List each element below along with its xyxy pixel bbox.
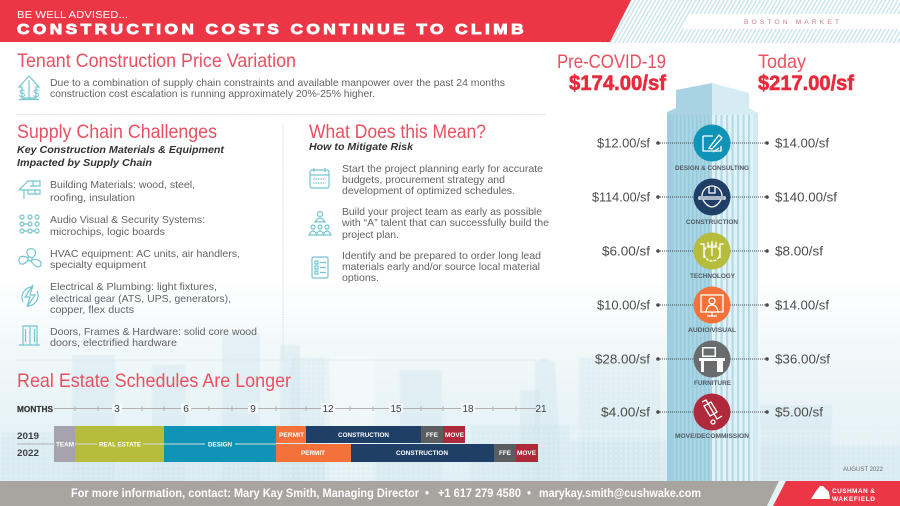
timeline axis: 9: [250, 404, 256, 415]
item: hvac: [50, 248, 240, 271]
pre-covid heading: $174.00/sf: [569, 72, 667, 95]
row: construction: CONSTRUCTION: [686, 219, 738, 226]
panel: tenant construction price variation: [17, 50, 505, 100]
icon: desk: [699, 347, 725, 372]
row: design and consulting: $12.00/sf: [597, 136, 650, 150]
row: audio visual: [597, 286, 829, 334]
item: build team: [341, 206, 549, 241]
item: start planning: [342, 163, 543, 197]
item: electrical: electrical gear (ATS, UPS, generators),: [50, 293, 231, 305]
background skyline: [0, 280, 900, 481]
subheading: [17, 144, 224, 169]
2019 bars: CONSTRUCTION: [338, 432, 389, 439]
contact line: +1 617 279 4580: [438, 488, 521, 500]
item: electrical: copper, flex ducts: [50, 304, 134, 316]
panel: schedules: [17, 370, 547, 462]
item: building materials: roofing, insulation: [50, 192, 135, 204]
2022 bars: PERMIT: [301, 450, 325, 457]
row: construction: $114.00/sf: [592, 190, 650, 204]
icon: team: [309, 212, 331, 235]
gantt bars: [54, 426, 538, 462]
2022 bars: [276, 444, 538, 462]
2019 bars: MOVE: [445, 432, 464, 439]
row: move and decommission: $5.00/sf: [775, 404, 823, 420]
year labels: 2019: [17, 431, 39, 442]
text block: construction cost escalation is running approximately 20%-25% higher.: [50, 88, 375, 100]
item: start planning: budgets, procurement strategy and: [342, 174, 505, 186]
logo: [811, 486, 875, 503]
text block: Due to a combination of supply chain constraints and available manpower over the past 24 months: [50, 77, 505, 89]
heading: Real Estate Schedules Are Longer: [17, 370, 291, 392]
2022 bars: MOVE: [517, 450, 536, 457]
subheading: Impacted by Supply Chain: [17, 157, 152, 169]
icon: gear and wrench: [700, 241, 724, 261]
row: technology: TECHNOLOGY: [690, 273, 736, 280]
icon: rising dollars: $: [33, 88, 39, 100]
tower illustration: [667, 83, 758, 481]
icon: doors: [19, 326, 40, 345]
logo: CUSHMAN &: [832, 488, 875, 495]
item: building materials: [50, 179, 195, 204]
contact line: •: [425, 488, 429, 500]
row: technology: [602, 232, 823, 280]
subheading: Key Construction Materials & Equipment: [17, 144, 224, 156]
row: technology: $8.00/sf: [775, 244, 823, 258]
timeline axis: MONTHS: [17, 405, 54, 414]
2019 bars: FFE: [426, 432, 438, 439]
timeline axis: 18: [462, 404, 474, 415]
title: [17, 10, 527, 38]
location label strip: BOSTON MARKET: [744, 19, 839, 26]
row: design and consulting: DESIGN & CONSULTING: [675, 165, 749, 172]
red title banner: [0, 0, 631, 42]
row: audio visual: $10.00/sf: [597, 298, 650, 312]
pre-covid heading: Pre-COVID-19: [557, 51, 666, 73]
icon: rising dollars: [19, 76, 39, 100]
row: furniture: [595, 340, 830, 387]
timeline axis: 3: [114, 404, 120, 415]
year labels: [17, 431, 39, 459]
row: audio visual: AUDIO/VISUAL: [688, 327, 736, 334]
panel: supply chain challenges: [17, 121, 257, 349]
text block: [50, 77, 505, 100]
2022 bars: FFE: [499, 450, 511, 457]
icon: fan: [19, 249, 41, 267]
item: hvac: specialty equipment: [50, 259, 146, 271]
footer: [0, 481, 900, 506]
panel: cost tower: [557, 51, 855, 481]
item: doors: Doors, Frames & Hardware: solid core wood: [50, 326, 257, 338]
icon: rising dollars: $: [19, 88, 25, 100]
icon: blueprint: [703, 135, 722, 152]
timeline axis: 15: [390, 404, 402, 415]
item: long lead: materials early and/or source local material: [342, 261, 540, 273]
timeline axis: [17, 403, 547, 415]
location label strip: [683, 14, 900, 29]
item: build team: project plan.: [342, 229, 399, 241]
row: construction: [592, 178, 837, 226]
heading: Tenant Construction Price Variation: [17, 50, 296, 72]
item: doors: doors, electrified hardware: [50, 337, 177, 349]
panel: what does this mean: [309, 121, 549, 284]
contact line: [71, 488, 701, 500]
shared phases: DESIGN: [208, 442, 232, 448]
item: audio visual: Audio Visual & Security Systems:: [50, 214, 205, 226]
row: move and decommission: MOVE/DECOMMISSION: [675, 433, 749, 440]
item: doors: [50, 326, 257, 349]
row: move and decommission: [601, 394, 823, 440]
heading: Supply Chain Challenges: [17, 121, 217, 143]
row: furniture: $36.00/sf: [775, 352, 830, 366]
row: construction: $140.00/sf: [775, 190, 837, 204]
item: building materials: Building Materials: wood, steel,: [50, 179, 195, 191]
shared phases: [54, 426, 276, 462]
row: technology: $6.00/sf: [602, 244, 650, 258]
timeline axis: 6: [183, 404, 189, 415]
icon: monitor: [701, 295, 723, 316]
item: long lead: Identify and be prepared to order long lead: [342, 250, 541, 262]
2019 bars: [276, 426, 465, 443]
logo: WAKEFIELD: [832, 496, 875, 503]
timeline axis: 12: [322, 404, 334, 415]
item: audio visual: [50, 214, 205, 238]
pre-covid heading: [557, 51, 667, 95]
item: start planning: Start the project planning early for accurate: [342, 163, 543, 175]
item: start planning: development of optimized schedules.: [342, 185, 515, 197]
row: design and consulting: [597, 124, 829, 172]
timeline axis: 21: [535, 404, 547, 415]
icon: hard hat: [699, 186, 725, 207]
item: hvac: HVAC equipment: AC units, air handlers,: [50, 248, 240, 260]
2022 bars: CONSTRUCTION: [396, 450, 448, 457]
item: long lead: options.: [342, 272, 379, 284]
row: move and decommission: $4.00/sf: [601, 404, 650, 420]
icon: lightning: [22, 285, 38, 307]
row: furniture: $28.00/sf: [595, 352, 650, 366]
row: furniture: FURNITURE: [694, 380, 732, 387]
icon: hand truck: [702, 400, 722, 424]
item: electrical: Electrical & Plumbing: light fixtures,: [50, 281, 217, 293]
item: long lead: [342, 250, 541, 284]
item: audio visual: microchips, logic boards: [50, 226, 165, 238]
icon: calendar: [310, 168, 329, 188]
year labels: 2022: [17, 448, 39, 459]
subheading: How to Mitigate Risk: [309, 141, 414, 153]
row: design and consulting: $14.00/sf: [775, 136, 829, 150]
item: build team: with “A” talent that can successfully build the: [341, 217, 549, 229]
today heading: [758, 51, 855, 95]
row: audio visual: $14.00/sf: [775, 298, 829, 312]
date: AUGUST 2022: [843, 466, 883, 473]
today heading: Today: [758, 51, 806, 73]
heading: What Does this Mean?: [309, 121, 486, 143]
title: BE WELL ADVISED...: [17, 10, 128, 21]
shared phases: REAL ESTATE: [99, 442, 141, 448]
header band: [0, 0, 900, 43]
today heading: $217.00/sf: [758, 72, 855, 95]
contact line: For more information, contact: Mary Kay Smith, Managing Director: [71, 488, 419, 500]
item: build team: Build your project team as early as possible: [342, 206, 542, 218]
shared phases: TEAM: [56, 442, 74, 448]
icon: circuit: [20, 215, 39, 233]
2019 bars: PERMIT: [279, 432, 304, 439]
title: CONSTRUCTION COSTS CONTINUE TO CLIMB: [17, 21, 527, 38]
icon: building materials: [19, 181, 40, 199]
icon: checklist: [312, 257, 328, 278]
item: electrical: [50, 281, 231, 316]
contact line: •: [527, 488, 531, 500]
contact line: marykay.smith@cushwake.com: [539, 488, 701, 500]
